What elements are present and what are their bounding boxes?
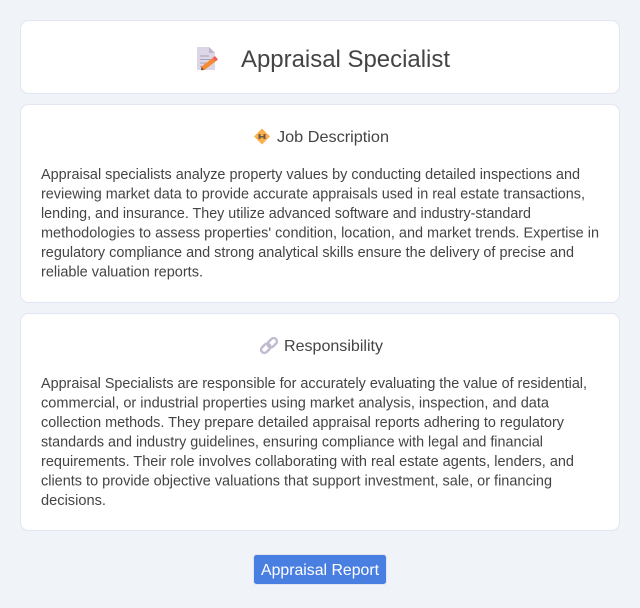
- panel: title card: [20, 20, 620, 94]
- text block: job description: regulatory compliance and strong analytical skills ensure the delivery of precise and: [41, 245, 574, 261]
- text block: responsibility: clients to provide objective valuations that support investment, sale, or financing: [41, 474, 552, 490]
- text block: responsibility: [41, 376, 587, 509]
- text block: responsibility: decisions.: [41, 493, 106, 509]
- heading: responsibility: Responsibility: [284, 338, 383, 355]
- icon: document with pencil: [197, 47, 218, 70]
- text block: job description: Appraisal specialists analyze property values by conducting detailed inspections and: [41, 167, 580, 183]
- text block: responsibility: standards and industry guidelines, ensuring compliance with legal and financial: [41, 434, 543, 450]
- text block: job description: reliable valuation reports.: [41, 264, 203, 280]
- button: appraisal report: Appraisal Report: [261, 562, 380, 579]
- icon: orange diamond sign: [254, 128, 270, 144]
- icon: chain link: [260, 337, 278, 354]
- title: Appraisal Specialist: [241, 46, 450, 73]
- text block: job description: [41, 167, 599, 280]
- heading: job description: Job Description: [277, 129, 389, 146]
- button: appraisal report: [254, 554, 386, 584]
- text block: responsibility: Appraisal Specialists are responsible for accurately evaluating the value of residential,: [41, 376, 587, 392]
- text block: job description: lending, and insurance. They utilize advanced software and industry-standard: [41, 206, 531, 222]
- text block: responsibility: collection methods. They prepare detailed appraisal reports adhering to regulatory: [41, 415, 565, 431]
- text block: responsibility: requirements. Their role involves collaborating with real estate agents, lenders, and: [41, 454, 574, 470]
- panel: job description: [20, 104, 620, 302]
- text block: responsibility: commercial, or industrial properties using market analysis, inspection, and data: [41, 396, 549, 412]
- panel: responsibility: [20, 314, 620, 530]
- text block: job description: methodologies to assess properties' condition, location, and market trends. Expertise in: [41, 226, 599, 242]
- text block: job description: reviewing market data to provide accurate appraisals used in real estate transactions,: [41, 186, 585, 202]
